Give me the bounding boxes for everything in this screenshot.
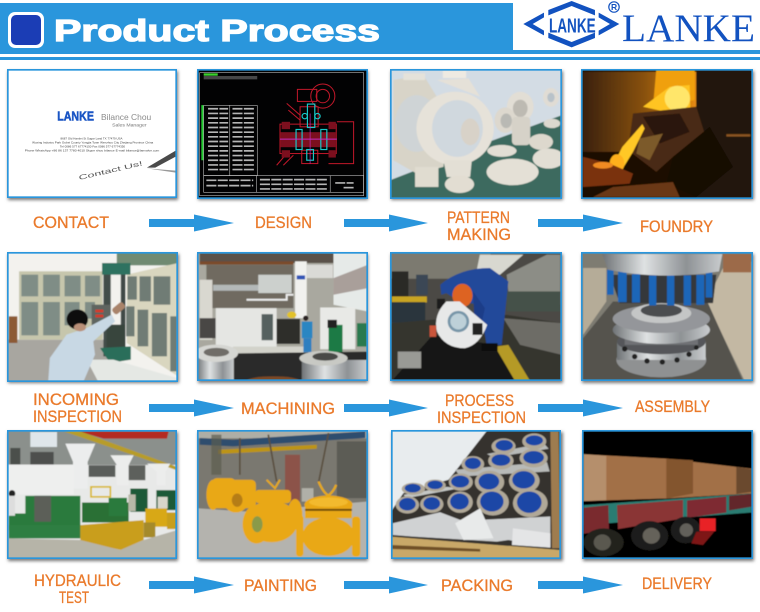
arrow: hydraulic test to painting [149,576,234,594]
panel: packing photo [391,430,563,561]
panel: design drawing photo [197,69,368,200]
panel: machining photo [195,252,368,386]
label: pattern making [447,208,511,244]
title: Product Process [54,13,380,48]
panel: contact photo: Phone WhatsApp +86 86 137 7780 4010 Skype shou bilance E-mail bilance@lanvalve.com [25,149,159,152]
panel: contact photo: Tel 0086 577 67774150 Fax 0086 577 67774350 [60,146,126,148]
label: pattern making: MAKING [447,225,511,244]
label: process inspection: INSPECTION [437,408,526,427]
panel: hydraulic test photo [7,430,178,561]
label: process inspection [437,391,526,427]
arrow: process inspection to assembly [538,400,623,416]
arrow: incoming inspection to machining [149,400,234,416]
panel: pattern making photo [390,69,565,200]
arrow: machining to process inspection [344,400,428,416]
panel: contact photo: Contact Us! [78,160,144,182]
panel: painting photo [197,430,368,561]
label: hydraulic test: HYDRAULIC [34,571,121,590]
icon: title square [8,12,44,48]
label: incoming inspection [33,390,122,426]
label: process inspection: PROCESS [445,391,514,410]
arrow: design to pattern making [344,214,428,232]
label: hydraulic test [34,571,121,607]
panel: contact photo: Sales Manager [112,123,147,128]
label: contact: CONTACT [33,213,109,232]
label: pattern making: PATTERN [447,208,510,227]
label: hydraulic test: TEST [59,588,89,607]
label: assembly: ASSEMBLY [635,397,710,416]
panel: contact photo [7,69,178,200]
label: design: DESIGN [255,213,312,232]
panel: contact photo: Bilance Chou [101,112,151,122]
panel: delivery photo [582,430,754,561]
label: foundry: FOUNDRY [640,217,713,236]
label: machining: MACHINING [241,399,335,418]
arrow: painting to packing [344,576,428,594]
logo: LANKE: LANKE [549,15,596,38]
arrow: pattern making to foundry [538,214,623,232]
panel: process inspection photo [390,252,563,383]
logo: LANKE [513,0,760,50]
label: delivery: DELIVERY [642,574,712,593]
panel: contact photo: 8687 Old Hamlet St Sugar Land TX 77479 USA [61,137,123,140]
label: incoming inspection: INSPECTION [33,407,122,426]
arrow: packing to delivery [538,576,623,594]
panel: contact photo: LANKE [57,109,94,124]
label: incoming inspection: INCOMING [33,390,119,409]
logo: LANKE: R [611,2,617,12]
arrow: contact to design [149,214,234,232]
panel: incoming inspection photo [7,252,179,383]
panel: contact photo: Wuxing Industry Park Oubei County Yongjia Town Wenzhou City Zhejiang Province China [32,141,154,144]
panel: assembly photo [581,252,754,383]
header banner [0,3,760,60]
logo: LANKE: LANKE [622,7,755,50]
label: painting: PAINTING [244,576,317,595]
panel: foundry photo [581,69,754,200]
label: packing: PACKING [441,576,513,595]
